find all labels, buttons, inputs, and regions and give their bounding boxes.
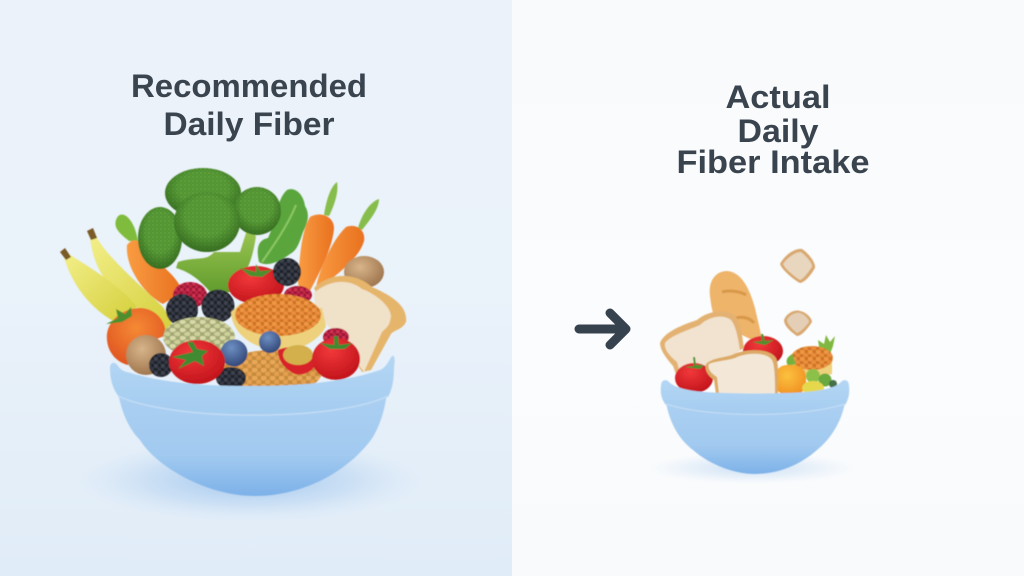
heading: Recommended Daily Fiber bbox=[131, 68, 367, 142]
lentil pile front bbox=[222, 350, 322, 394]
walnut front bbox=[126, 335, 166, 375]
orange lentil bowl bbox=[231, 294, 326, 351]
halved fruit bbox=[278, 345, 315, 375]
berries front bbox=[149, 328, 349, 389]
tomato front right bbox=[312, 336, 360, 380]
green vegetables bbox=[802, 369, 837, 395]
right panel background bbox=[512, 0, 1024, 576]
berries back bbox=[166, 258, 312, 326]
green lentils bbox=[163, 317, 235, 357]
pineapple lentil bowl bbox=[790, 335, 835, 376]
bowl body bbox=[110, 356, 395, 496]
broccoli bbox=[138, 168, 281, 294]
orange tomato bbox=[106, 307, 165, 365]
baguette bbox=[710, 271, 762, 345]
small bowl illustration bbox=[647, 249, 857, 484]
banana back bbox=[87, 228, 173, 333]
floating bread piece small bbox=[784, 311, 812, 336]
heading: Recommended Daily Fiber: Recommended bbox=[131, 68, 367, 104]
tomato top bbox=[228, 264, 284, 304]
carrot left bbox=[115, 215, 182, 304]
tomato left bbox=[675, 357, 713, 393]
heading: Actual Daily Fiber Intake: Fiber Intake bbox=[676, 144, 870, 180]
carrots right bbox=[298, 182, 379, 296]
left panel background bbox=[0, 0, 512, 576]
bread slice left bbox=[660, 311, 744, 385]
small bowl body bbox=[661, 380, 849, 474]
heading: Actual Daily Fiber Intake: Actual bbox=[726, 79, 830, 115]
arrow bbox=[579, 313, 626, 345]
banana front bbox=[60, 248, 137, 322]
heading: Recommended Daily Fiber: Daily Fiber bbox=[164, 106, 334, 142]
bread slice bbox=[314, 276, 406, 372]
lettuce leaf bbox=[258, 189, 308, 264]
small bowl shadow bbox=[647, 452, 857, 484]
tomato front left bbox=[169, 340, 225, 384]
bread slice front bbox=[705, 350, 778, 394]
yellow pepper bbox=[775, 354, 806, 395]
floating bread piece large bbox=[780, 249, 815, 283]
tomato back bbox=[743, 334, 783, 366]
full bowl illustration bbox=[60, 168, 425, 522]
bowl shadow bbox=[75, 438, 425, 522]
heading: Actual Daily Fiber Intake bbox=[676, 79, 870, 180]
walnut back bbox=[344, 256, 384, 288]
heading: Actual Daily Fiber Intake: Daily bbox=[738, 113, 819, 149]
